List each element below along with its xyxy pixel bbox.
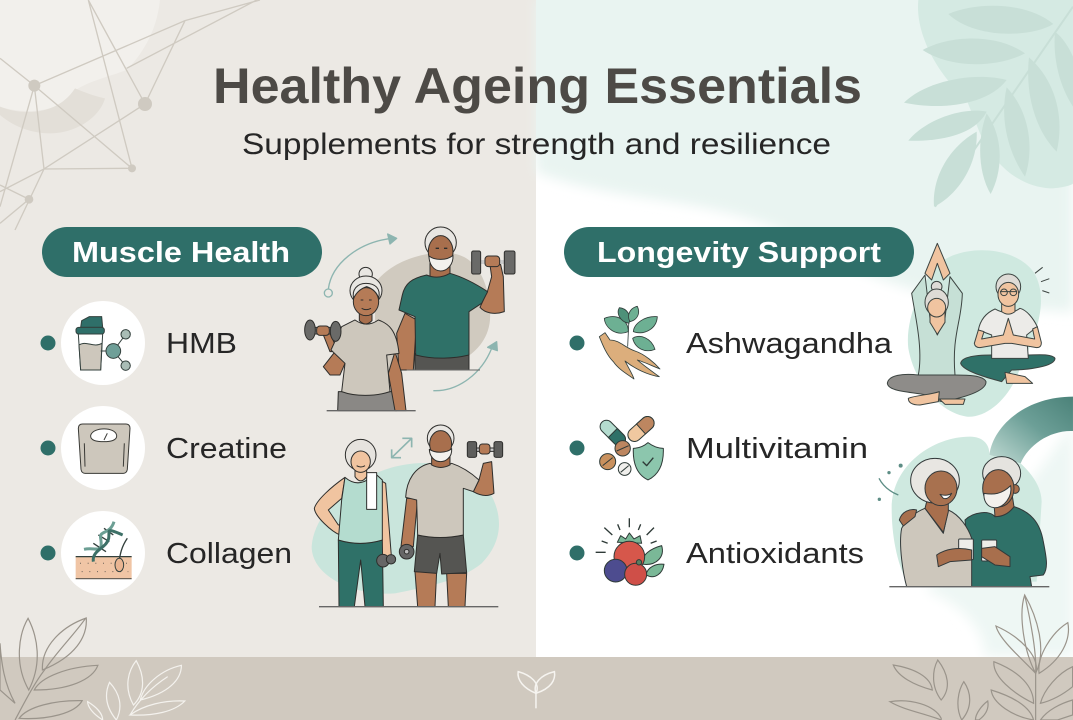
leaf decoration bottom-right bbox=[890, 595, 1073, 720]
illustration: couple lifting dumbbells bbox=[305, 227, 515, 411]
icon: sprout bbox=[518, 672, 555, 708]
illustration: couple with drinks bbox=[878, 437, 1049, 587]
footer band bbox=[0, 657, 1073, 720]
illustration: couple with towel and weights bbox=[312, 425, 503, 607]
arrow: curved right bbox=[433, 342, 497, 391]
heading: Muscle Health bbox=[42, 227, 322, 277]
label: Creatine bbox=[166, 433, 287, 465]
list item: Multivitamin bbox=[570, 414, 868, 480]
list item: Creatine bbox=[40, 406, 287, 490]
label: Multivitamin bbox=[686, 433, 868, 465]
list item: HMB bbox=[40, 301, 237, 385]
title: Healthy Ageing Essentials bbox=[213, 58, 862, 114]
subtitle: Supplements for strength and resilience bbox=[242, 128, 831, 161]
arch decoration bbox=[989, 397, 1073, 463]
arrow: double-headed bbox=[392, 438, 412, 458]
icon: ashwagandha root bbox=[599, 306, 660, 379]
label: Antioxidants bbox=[686, 538, 864, 570]
leaf decoration bottom-left bbox=[0, 618, 98, 720]
icon: pills and shield bbox=[597, 414, 663, 480]
leaf decoration top-right bbox=[904, 0, 1073, 207]
white leaf decoration bottom-left bbox=[88, 661, 185, 720]
list item: Antioxidants bbox=[570, 518, 864, 585]
label: Ashwagandha bbox=[686, 328, 893, 360]
illustration: couple doing yoga bbox=[887, 243, 1055, 417]
label: HMB bbox=[166, 328, 237, 360]
label: Collagen bbox=[166, 538, 292, 570]
panel: left background bbox=[0, 0, 536, 657]
heading: Muscle Health: Muscle Health bbox=[72, 237, 290, 269]
icon: dna and skin bbox=[76, 522, 132, 579]
arrow: curved up bbox=[324, 234, 397, 297]
network decoration top-left bbox=[0, 0, 260, 230]
icon: weighing scale bbox=[78, 424, 130, 473]
heading: Longevity Support bbox=[564, 227, 914, 277]
icon: shaker and molecule bbox=[76, 317, 130, 370]
panel: right background bbox=[536, 0, 1073, 657]
list item: Ashwagandha bbox=[570, 306, 893, 379]
icon: berries bbox=[596, 518, 664, 585]
list item: Collagen bbox=[40, 511, 292, 595]
heading: Longevity Support: Longevity Support bbox=[597, 237, 881, 269]
